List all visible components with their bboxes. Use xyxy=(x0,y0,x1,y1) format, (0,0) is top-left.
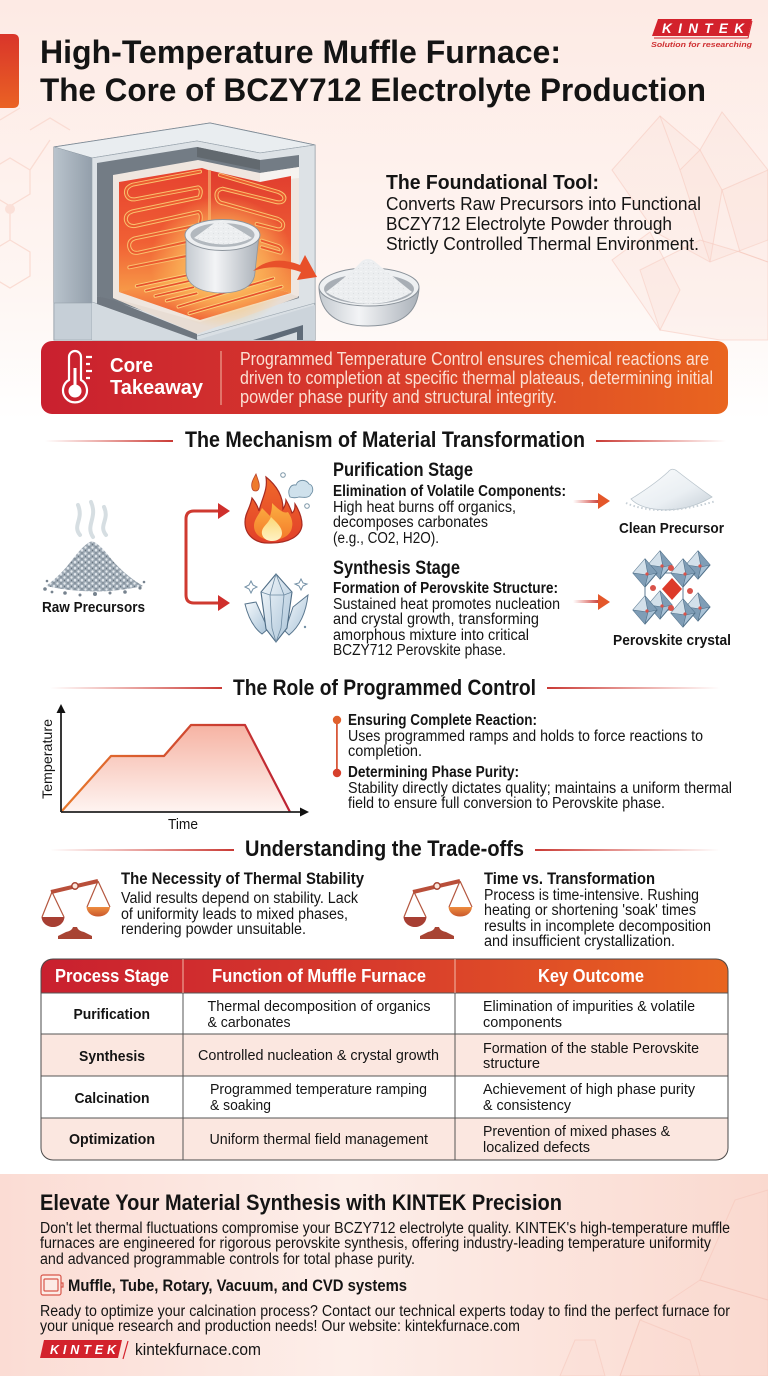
text block: time vs transformation: heating or shortening 'soak' times xyxy=(484,902,696,919)
text block: synthesis stage: amorphous mixture into critical xyxy=(333,627,529,644)
text block: synthesis stage: BCZY712 Perovskite phase. xyxy=(333,642,506,659)
timeline bullets xyxy=(333,716,341,777)
row: purification: Elimination of impurities & volatile xyxy=(483,998,695,1015)
row: synthesis: Synthesis xyxy=(79,1048,145,1065)
logo: KINTEK: Solution for researching xyxy=(651,40,752,49)
row: purification xyxy=(74,998,695,1031)
text block: synthesis stage xyxy=(333,558,560,659)
text block: purification stage: decomposes carbonates xyxy=(333,514,488,531)
text block: the foundational tool: The Foundational Tool: xyxy=(386,172,599,194)
text block: purification stage: High heat burns off organics, xyxy=(333,499,516,516)
panel: core takeaway: Core xyxy=(110,355,153,377)
logo: KINTEK: KINTEK xyxy=(662,21,745,36)
title accent bar xyxy=(0,34,19,108)
text block: time vs transformation xyxy=(484,870,711,950)
row: calcination: Calcination xyxy=(74,1090,150,1107)
arrow: branching to purification and synthesis xyxy=(152,503,230,611)
row: synthesis: Controlled nucleation & crystal growth xyxy=(198,1047,439,1064)
text block: necessity of thermal stability: Valid results depend on stability. Lack xyxy=(121,890,358,907)
row: calcination: & soaking xyxy=(210,1097,271,1114)
text block: ensuring complete reaction xyxy=(348,712,703,760)
panel: footer call to action: Muffle, Tube, Rotary, Vacuum, and CVD systems xyxy=(68,1277,407,1295)
panel: core takeaway: driven to completion at specific thermal plateaus, determining initial xyxy=(240,368,713,388)
text block: necessity of thermal stability: rendering powder unsuitable. xyxy=(121,921,306,938)
row: purification: components xyxy=(483,1014,562,1031)
icon: balance scale left xyxy=(42,876,110,939)
row: optimization xyxy=(69,1123,670,1156)
text block: determining phase purity: field to ensure full conversion to Perovskite phase. xyxy=(348,795,665,812)
row: optimization: localized defects xyxy=(483,1139,590,1156)
label: raw precursors: Raw Precursors xyxy=(42,599,145,616)
illustration: muffle furnace with crucible xyxy=(54,123,419,340)
heading: role of programmed control: The Role of Programmed Control xyxy=(233,675,536,700)
icon: thermometer xyxy=(63,351,92,402)
panel: footer call to action: kintekfurnace.com xyxy=(135,1341,261,1359)
icon: clean precursor pile xyxy=(626,469,716,510)
text block: ensuring complete reaction: Ensuring Complete Reaction: xyxy=(348,712,537,729)
panel: core takeaway: powder phase purity and structural integrity. xyxy=(240,387,557,407)
label: clean precursor: Clean Precursor xyxy=(619,520,724,537)
title: The Core of BCZY712 Electrolyte Production xyxy=(40,72,706,108)
icon: crystal cluster xyxy=(245,574,308,642)
panel: footer call to action: Elevate Your Material Synthesis with KINTEK Precision xyxy=(40,1190,562,1215)
table header xyxy=(55,965,644,986)
chart: temperature vs time program: Time xyxy=(168,817,198,833)
label: perovskite crystal: Perovskite crystal xyxy=(613,632,731,649)
text block: time vs transformation: results in incomplete decomposition xyxy=(484,918,711,935)
text block: necessity of thermal stability xyxy=(121,870,365,938)
text block: time vs transformation: Process is time-intensive. Rushing xyxy=(484,887,699,904)
text block: synthesis stage: and crystal growth, transforming xyxy=(333,611,539,628)
logo: KINTEK xyxy=(651,19,752,49)
text block: synthesis stage: Formation of Perovskite Structure: xyxy=(333,580,558,597)
row: optimization: Prevention of mixed phases & xyxy=(483,1123,670,1140)
text block: ensuring complete reaction: completion. xyxy=(348,743,422,760)
panel: footer call to action: your unique research and production needs! Our website: kintekfurnace.com xyxy=(40,1318,520,1335)
logo: KINTEK small xyxy=(40,1340,128,1359)
text block: purification stage xyxy=(333,460,566,547)
row: purification: Purification xyxy=(74,1006,150,1023)
text block: time vs transformation: and insufficient crystallization. xyxy=(484,933,675,950)
text block: synthesis stage: Sustained heat promotes nucleation xyxy=(333,596,560,613)
table: process stages xyxy=(41,959,728,1160)
title: High-Temperature Muffle Furnace: xyxy=(40,34,561,70)
text block: determining phase purity xyxy=(348,764,732,812)
logo: KINTEK small: KINTEK xyxy=(50,1343,117,1357)
row: calcination xyxy=(74,1081,695,1114)
text block: time vs transformation: Time vs. Transformation xyxy=(484,870,655,888)
arrow: to clean precursor xyxy=(573,493,610,509)
row: optimization: Optimization xyxy=(69,1131,155,1148)
table header: Process Stage xyxy=(55,965,169,986)
row: purification: Thermal decomposition of organics xyxy=(208,998,430,1015)
heading: understanding the trade-offs: Understanding the Trade-offs xyxy=(245,836,524,861)
icon: perovskite crystal lattice xyxy=(633,551,710,627)
row: synthesis: structure xyxy=(483,1055,540,1072)
table header: Function of Muffle Furnace xyxy=(212,965,426,986)
arrow: to perovskite crystal xyxy=(573,594,610,610)
title xyxy=(40,34,706,108)
text block: the foundational tool: Converts Raw Precursors into Functional xyxy=(386,194,701,214)
chart: temperature vs time program xyxy=(39,704,309,833)
row: synthesis xyxy=(79,1040,699,1072)
text block: synthesis stage: Synthesis Stage xyxy=(333,558,460,579)
row: calcination: Programmed temperature ramping xyxy=(210,1081,427,1098)
icon: balance scale right xyxy=(404,876,472,939)
panel: core takeaway xyxy=(41,341,728,414)
row: purification: & carbonates xyxy=(208,1014,290,1031)
table header: Key Outcome xyxy=(538,965,644,986)
row: calcination: & consistency xyxy=(483,1097,571,1114)
background: top region xyxy=(0,0,768,420)
heading: mechanism of material transformation: The Mechanism of Material Transformation xyxy=(185,427,585,452)
row: calcination: Achievement of high phase purity xyxy=(483,1081,695,1098)
text block: purification stage: Purification Stage xyxy=(333,460,473,481)
row: optimization: Uniform thermal field management xyxy=(210,1131,429,1148)
background: faint crystal polyhedra xyxy=(612,112,768,340)
panel: footer call to action: furnaces are engineered for rigorous perovskite synthesis, offering industry-leading temperature uniformity xyxy=(40,1235,711,1252)
text block: necessity of thermal stability: of uniformity leads to mixed phases, xyxy=(121,906,348,923)
text block: ensuring complete reaction: Uses programmed ramps and holds to force reactions to xyxy=(348,728,703,745)
text block: determining phase purity: Determining Phase Purity: xyxy=(348,764,519,781)
row: synthesis: Formation of the stable Perovskite xyxy=(483,1040,699,1057)
background: hexagon network xyxy=(0,108,70,288)
text block: the foundational tool: Strictly Controlled Thermal Environment. xyxy=(386,234,699,254)
text block: necessity of thermal stability: The Necessity of Thermal Stability xyxy=(121,870,365,888)
icon: furnace outline xyxy=(41,1275,63,1295)
panel: core takeaway: Programmed Temperature Control ensures chemical reactions are xyxy=(240,349,709,369)
text block: the foundational tool xyxy=(386,172,701,254)
panel: footer call to action xyxy=(0,1174,768,1376)
text block: determining phase purity: Stability directly dictates quality; maintains a uniform thermal xyxy=(348,780,732,797)
icon: flame with smoke xyxy=(245,473,313,543)
text block: purification stage: Elimination of Volatile Components: xyxy=(333,483,566,500)
footer crystal pattern xyxy=(560,1190,768,1376)
text block: the foundational tool: BCZY712 Electrolyte Powder through xyxy=(386,214,672,234)
panel: core takeaway: Takeaway xyxy=(110,377,204,399)
panel: footer call to action: and advanced programmable controls for total phase purity. xyxy=(40,1251,415,1268)
icon: raw precursor pile with steam xyxy=(43,502,145,596)
chart: temperature vs time program: Temperature xyxy=(39,719,55,799)
text block: purification stage: (e.g., CO2, H2O). xyxy=(333,530,439,547)
